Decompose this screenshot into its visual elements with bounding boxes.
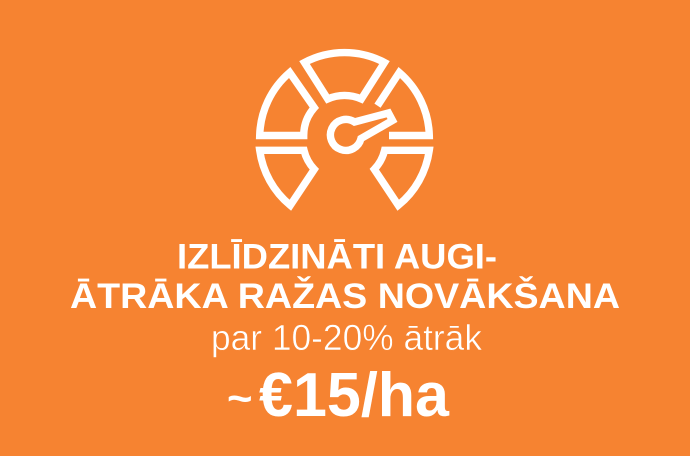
price: €15/ha <box>259 361 450 430</box>
heading line 1: IZLĪDZINĀTI AUGI- <box>177 236 497 276</box>
heading line 2: ĀTRĀKA RAŽAS NOVĀKŠANA <box>70 276 620 316</box>
gauge segment: upper left <box>260 72 314 136</box>
gauge segment: top <box>304 53 384 99</box>
subheading: par 10-20% ātrāk <box>211 317 483 358</box>
gauge segment: lower left <box>260 150 314 205</box>
gauge segment: upper right <box>378 72 429 136</box>
icon: speedometer gauge <box>260 53 429 205</box>
gauge segment: lower right <box>374 150 429 205</box>
price: ~ <box>227 374 252 422</box>
gauge needle and hub <box>330 113 392 150</box>
